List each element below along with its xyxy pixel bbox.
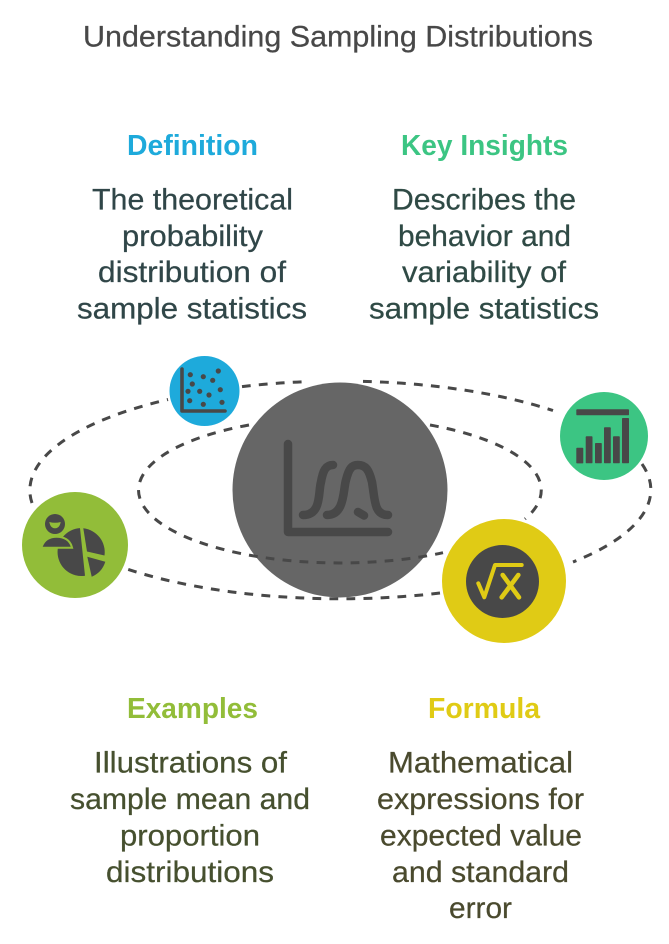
text block: key insights: [369, 130, 599, 326]
description: formula: and standard: [392, 856, 569, 889]
heading: examples: Examples: [127, 693, 258, 725]
node: examples, green person with pie chart: [22, 492, 128, 598]
node: formula, yellow square root: [442, 519, 566, 643]
text block: examples: [70, 693, 310, 889]
description: examples: [70, 746, 310, 889]
description: key insights: sample statistics: [369, 292, 599, 326]
icon: square root of x: [478, 565, 522, 597]
node: key insights, teal bar chart: [560, 392, 648, 480]
description: definition: distribution of: [98, 256, 287, 289]
central circle: [232, 382, 448, 598]
description: formula: error: [449, 892, 512, 925]
description: examples: sample mean and: [70, 783, 310, 816]
icon: scatter plot: [182, 368, 225, 411]
description: definition: sample statistics: [77, 292, 307, 326]
description: formula: expressions for: [377, 783, 584, 816]
orbit: outer dashed ellipse: [30, 381, 651, 599]
description: key insights: behavior and: [398, 220, 571, 253]
description: examples: proportion: [120, 820, 260, 852]
text block: definition: [77, 130, 307, 326]
description: examples: Illustrations of: [94, 746, 288, 780]
orbit: inner dashed ellipse: [138, 425, 541, 563]
icon: distribution curves: [288, 444, 388, 532]
description: key insights: variability of: [402, 256, 567, 289]
description: formula: expected value: [380, 820, 582, 852]
heading: formula: Formula: [428, 693, 541, 725]
heading: key insights: Key Insights: [401, 130, 568, 162]
icon: bar chart: [576, 409, 629, 463]
title: Understanding Sampling Distributions: [83, 20, 593, 54]
description: examples: distributions: [106, 856, 274, 889]
node: definition, blue scatter plot: [170, 356, 240, 426]
description: formula: [377, 746, 584, 925]
description: definition: The theoretical: [92, 184, 293, 216]
heading: definition: Definition: [127, 130, 258, 162]
description: definition: probability: [122, 220, 263, 253]
icon: person with pie chart: [43, 514, 105, 577]
description: key insights: [369, 184, 599, 326]
description: definition: [77, 184, 307, 326]
text block: formula: [377, 693, 584, 925]
description: key insights: Describes the: [392, 184, 576, 216]
description: formula: Mathematical: [388, 746, 573, 780]
